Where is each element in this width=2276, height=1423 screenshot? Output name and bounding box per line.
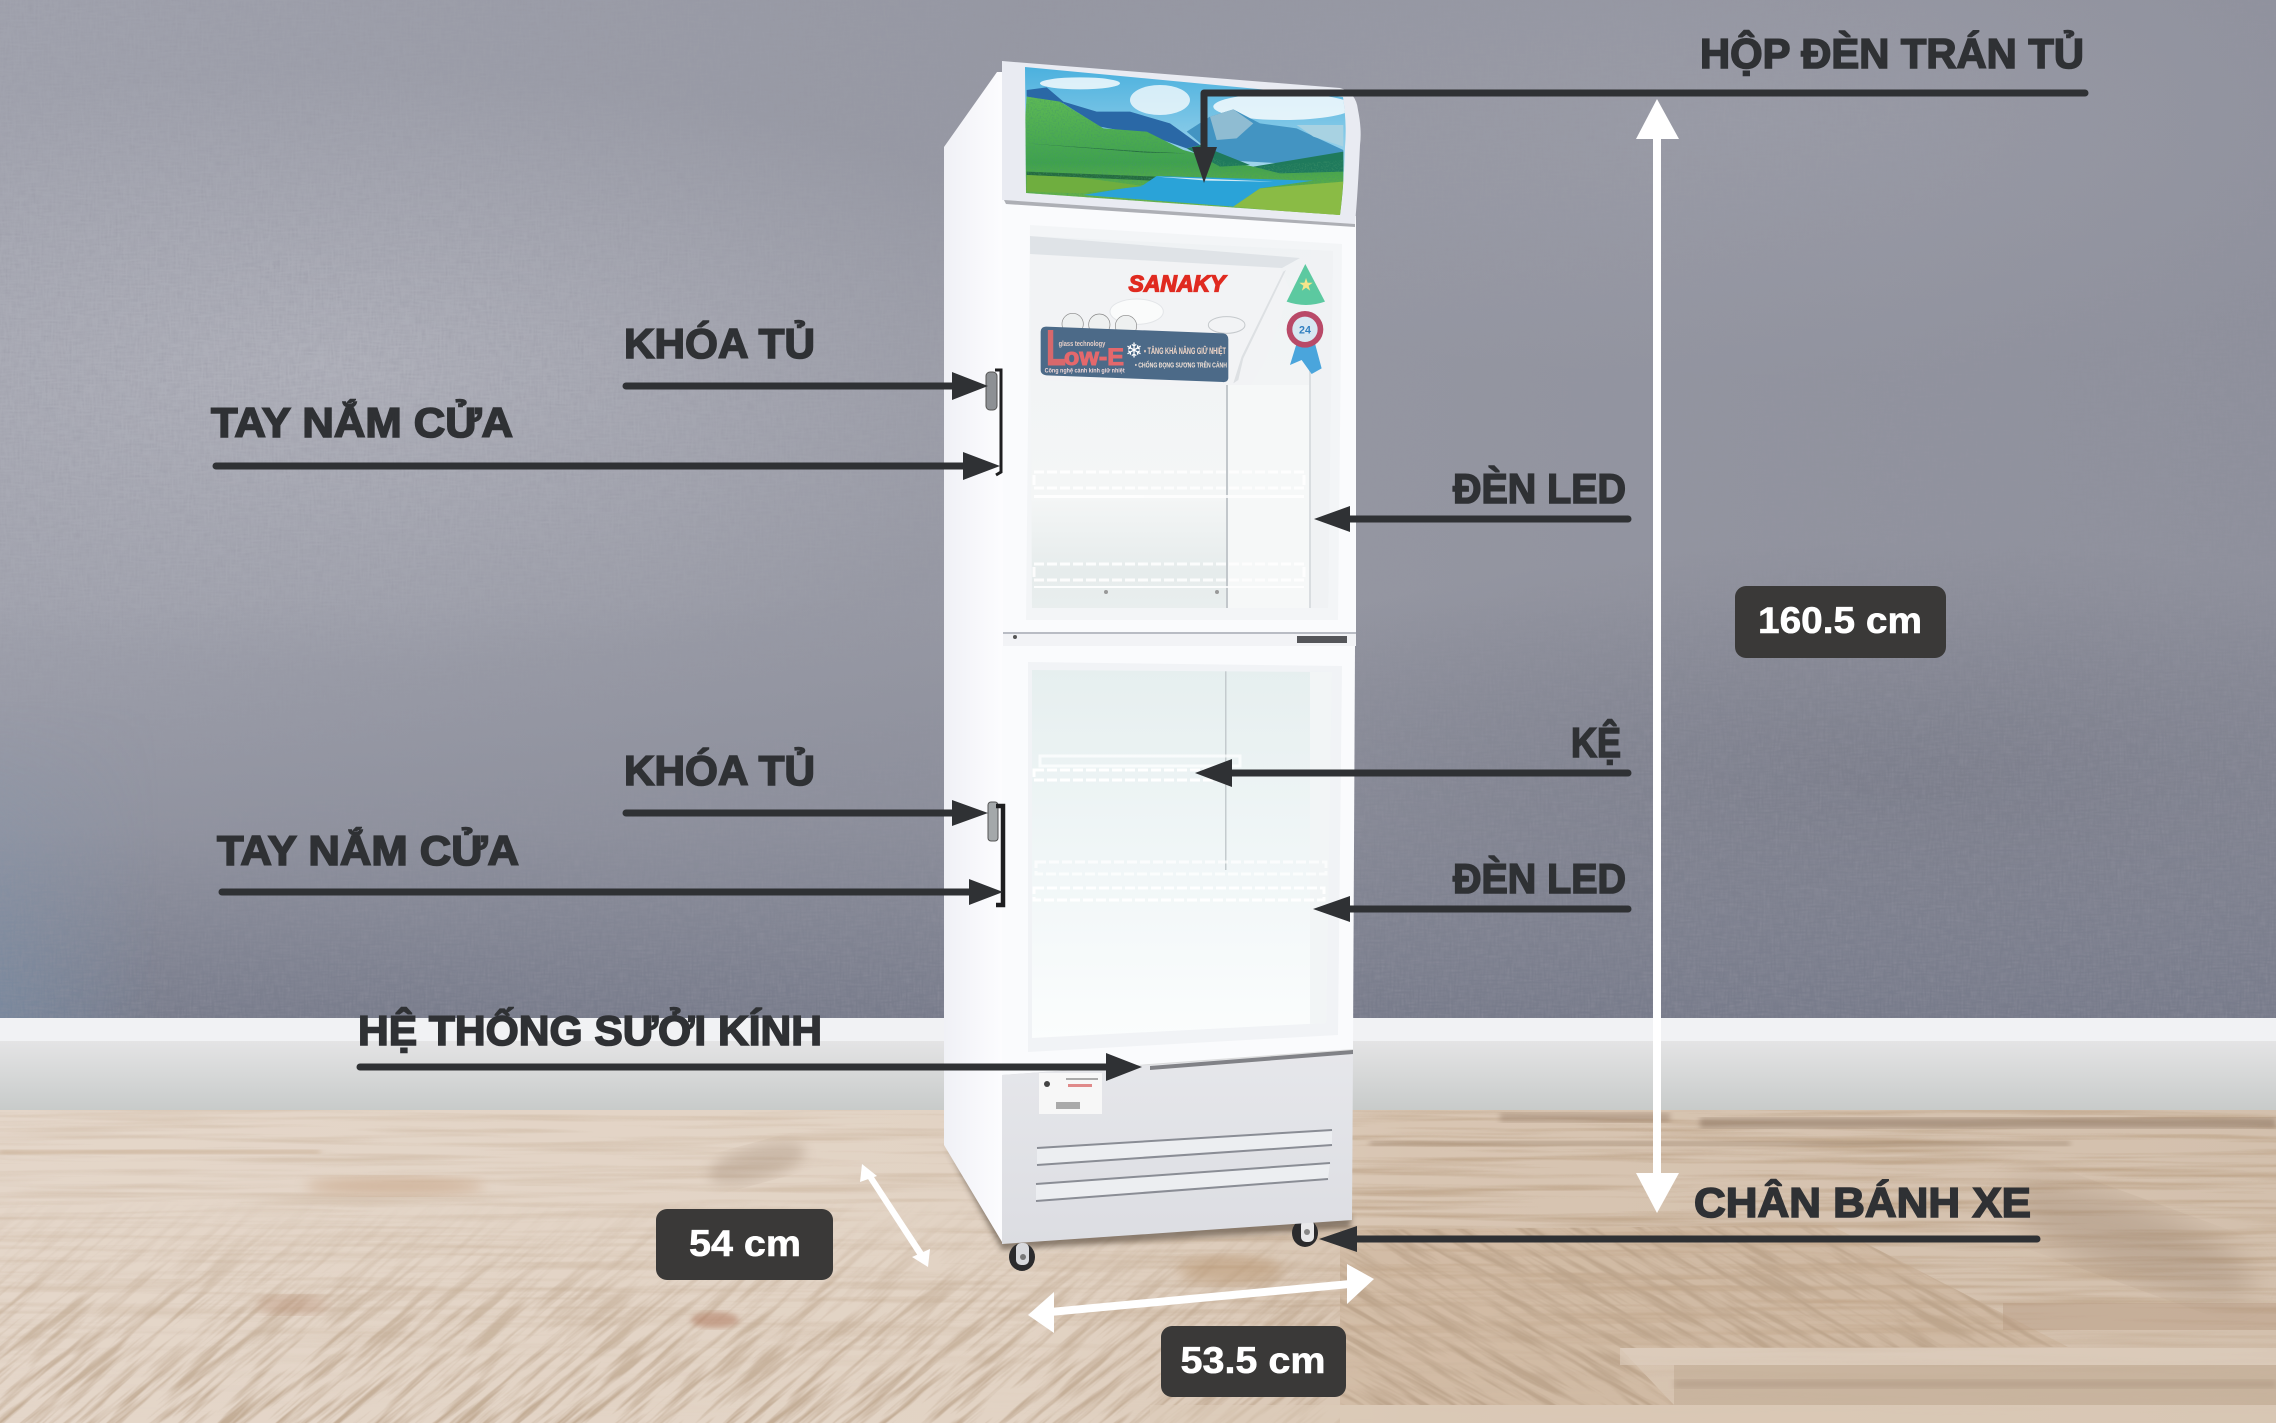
callout: tay nắm cửa trên: TAY NẮM CỬA [211,398,513,446]
baseboard [0,1018,2276,1110]
callout: hệ thống sưởi kính [358,1006,1142,1081]
lower door [1002,646,1355,1075]
shelf upper [1032,470,1228,498]
background: fabric wall [0,0,2276,1018]
fridge [944,60,1361,1271]
callout: hộp đèn trán tủ: HỘP ĐÈN TRÁN TỦ [1700,29,2084,77]
badge: height 160.5 cm: 160.5 cm [1758,600,1922,641]
callout: tay nắm cửa dưới [217,826,1003,905]
upper door [1002,198,1356,633]
low-e banner: Công nghệ cảnh kính giữ nhiệt [1045,368,1125,375]
callout: đèn led dưới [1313,855,1628,922]
callout: đèn led trên [1314,465,1628,532]
background: wooden floor [0,1110,2276,1423]
lower lock [988,802,998,841]
shelf 1 [1034,756,1240,780]
low-e banner: • TĂNG KHẢ NĂNG GIỮ NHIỆT [1144,345,1226,356]
green triangle badge [1287,264,1325,305]
callout: đèn led dưới: ĐÈN LED [1453,855,1626,902]
low-e banner: ❄ [1125,338,1143,362]
shelf lower [1032,562,1228,588]
fridge shadow [945,1145,1352,1250]
badge: width 53.5 cm: 53.5 cm [1180,1340,1326,1381]
base panel [1002,1050,1353,1244]
lower handle [996,806,1003,905]
upper handle [995,370,1001,475]
shelf ledge [1233,270,1286,383]
callout: khóa tủ dưới: KHÓA TỦ [624,746,815,794]
landscape picture [1025,67,1346,215]
product sticker [1039,1073,1102,1114]
callout: khóa tủ trên [624,319,988,400]
low-e banner: • CHỐNG ĐỌNG SƯƠNG TRÊN CÁNH [1135,359,1227,369]
callout: kệ [1195,718,1628,787]
callout: hộp đèn trán tủ [1192,29,2085,183]
callout: hệ thống sưởi kính: HỆ THỐNG SƯỞI KÍNH [358,1006,822,1054]
badge: height 160.5 cm [1735,586,1946,658]
louvres [1036,1130,1332,1201]
upper lock [986,372,997,410]
callout: tay nắm cửa dưới: TAY NẮM CỬA [217,826,519,874]
medal badge [1287,311,1323,374]
badge: width 53.5 cm [1161,1326,1346,1397]
arrow: height dimension [1636,99,1679,1213]
callout: đèn led trên: ĐÈN LED [1453,465,1626,512]
brand logo: SANAKY [1129,270,1228,296]
lower glass [1030,668,1335,1040]
green triangle badge: ★ [1298,276,1314,296]
callout: khóa tủ trên: KHÓA TỦ [624,319,815,367]
feature circles [1062,313,1137,337]
callout: chân bánh xe: CHÂN BÁNH XE [1694,1178,2031,1226]
callout: chân bánh xe [1319,1178,2037,1252]
badge: depth 54 cm: 54 cm [689,1223,801,1264]
low-e banner: ow-E [1064,344,1124,371]
brand sticker group [1041,264,1325,383]
medal badge: 24 [1299,324,1311,336]
arrow: width dimension [1028,1264,1374,1333]
low-e banner [1041,320,1228,382]
door divider [1003,632,1356,646]
callout: tay nắm cửa trên [211,398,1000,480]
side panel [944,72,1006,1242]
callout: khóa tủ dưới [624,746,988,826]
upper glass [1030,235,1336,610]
low-e banner: glass technology [1059,339,1106,348]
low-e banner: L [1046,320,1066,376]
arrow: depth dimension [860,1164,930,1267]
callout: kệ: KỆ [1571,718,1621,766]
badge: depth 54 cm [656,1209,833,1280]
icon: front wheel [1009,1243,1035,1271]
fan grille [1110,299,1163,324]
icon: rear wheel [1292,1219,1318,1247]
shelf 2 [1034,862,1326,900]
light box [1002,60,1361,227]
